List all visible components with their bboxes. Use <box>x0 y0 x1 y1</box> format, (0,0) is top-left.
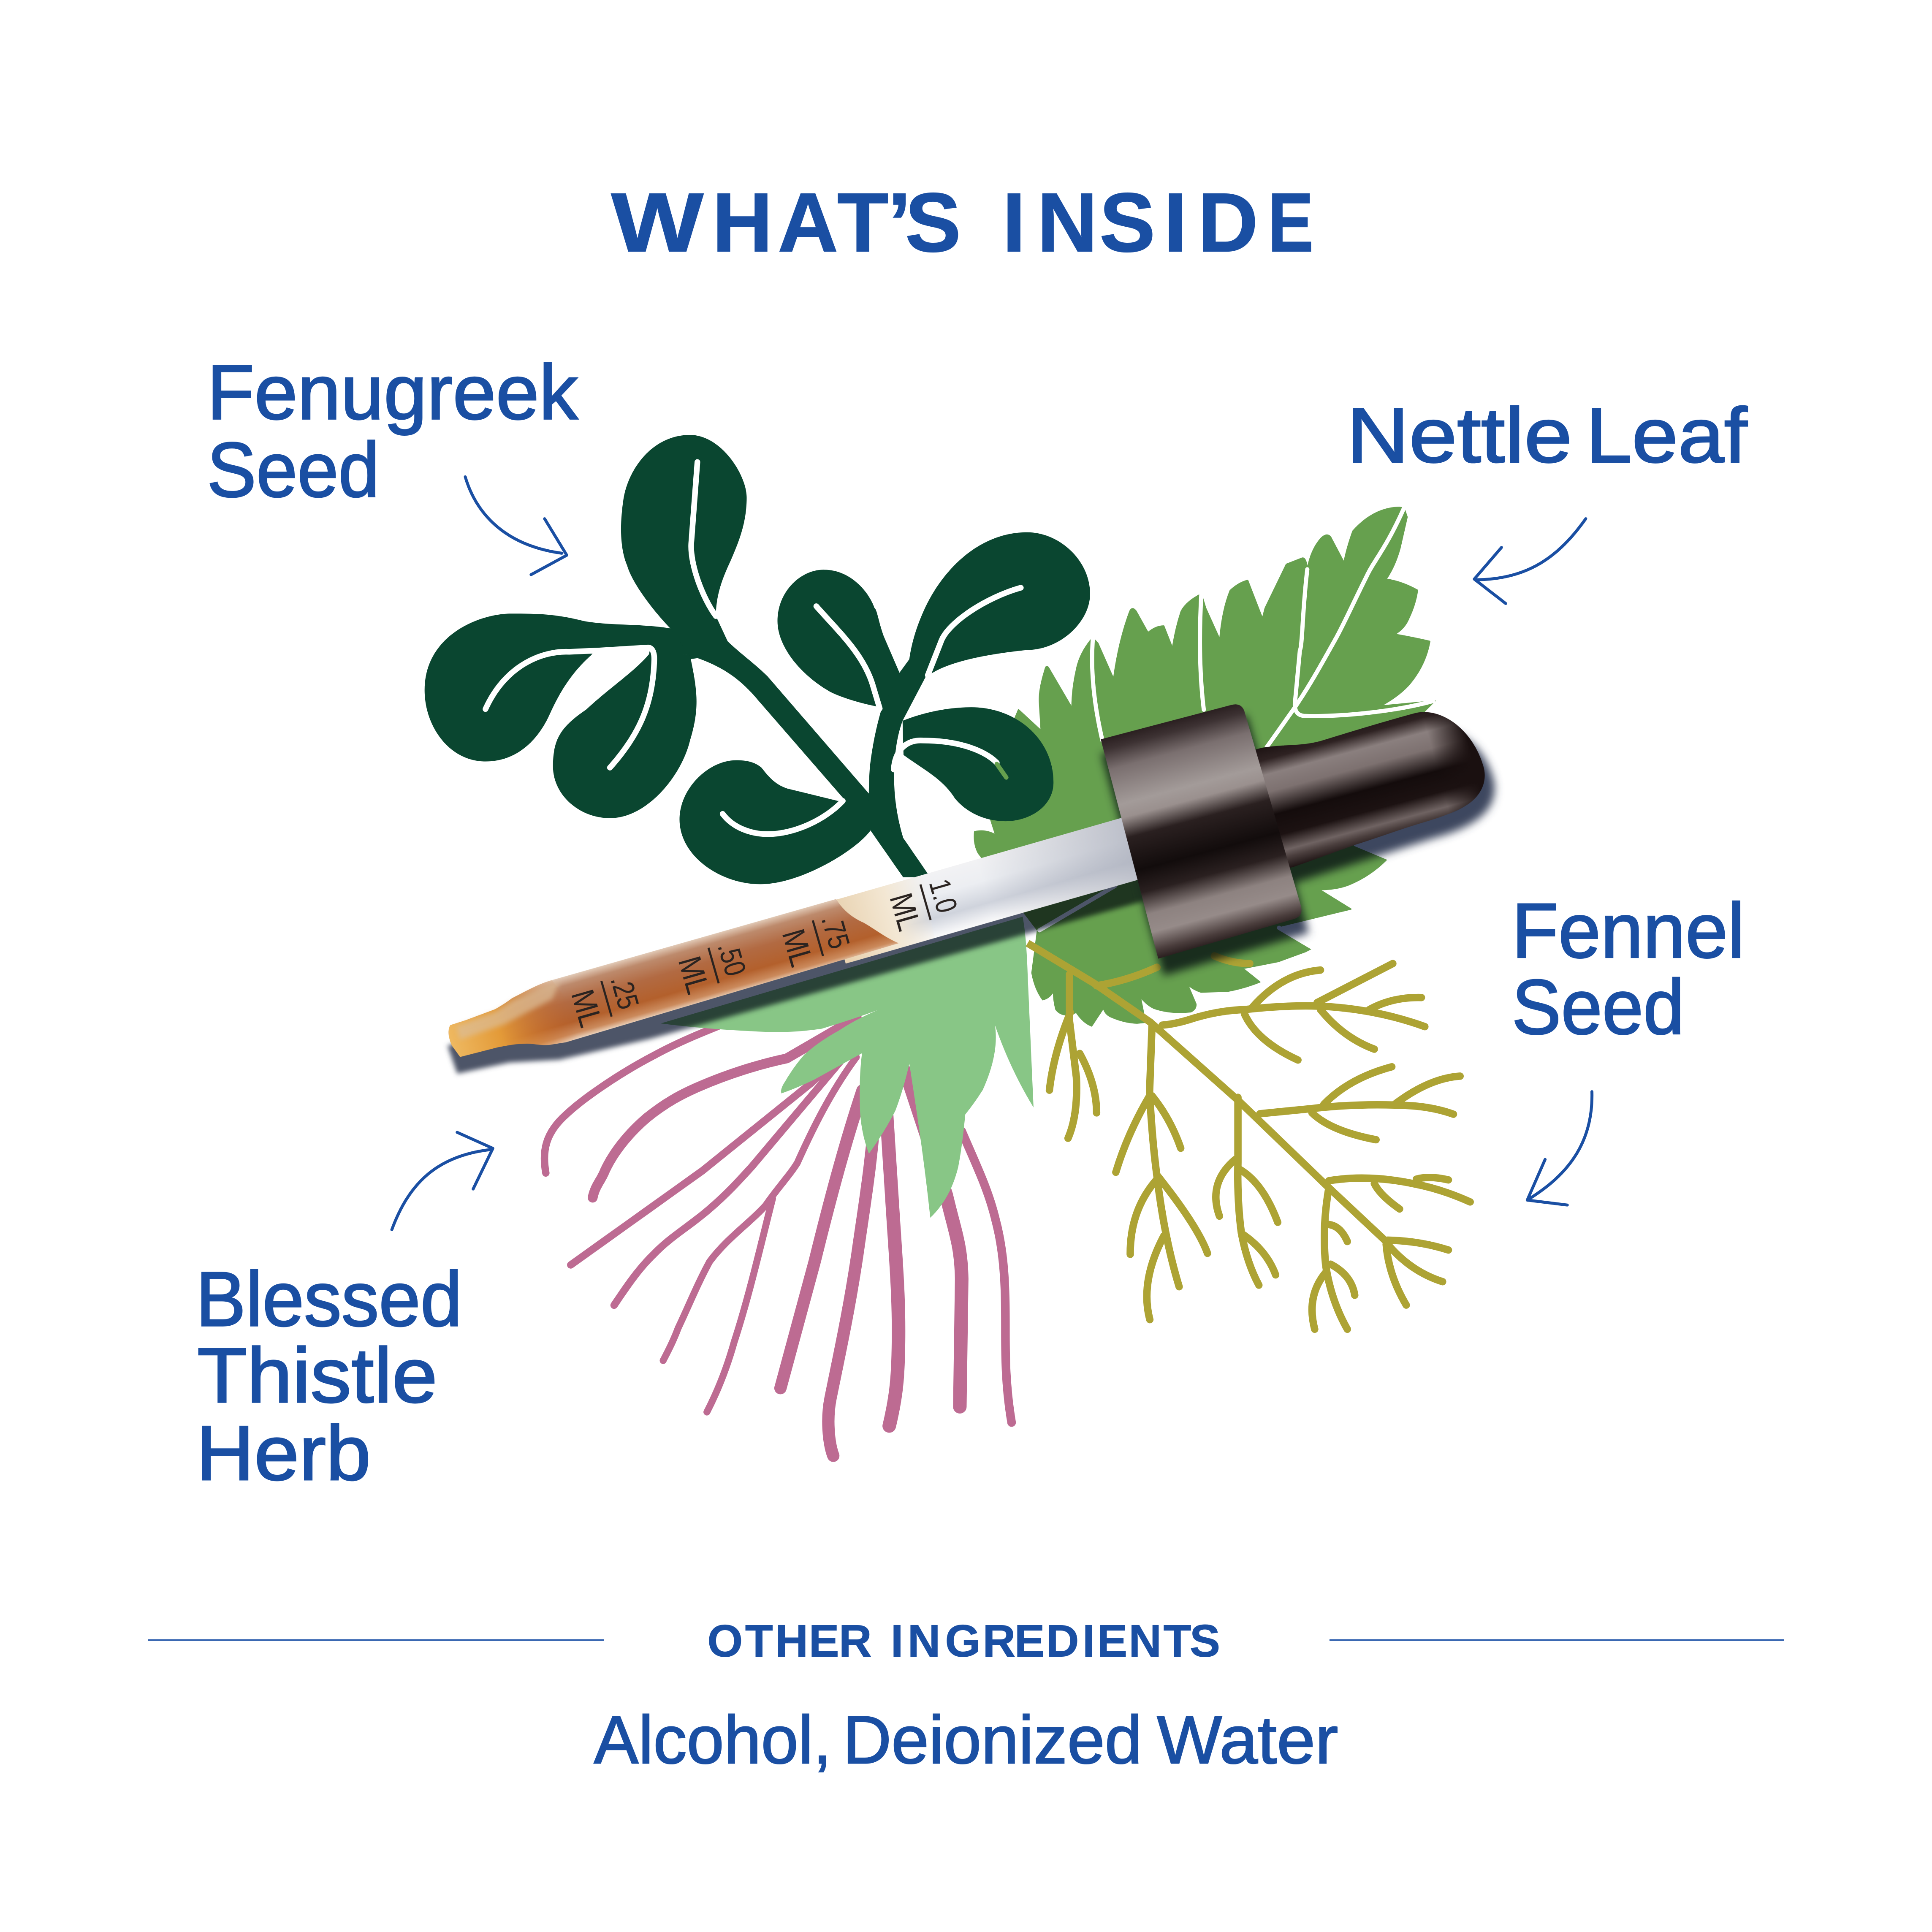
label: Blessed Thistle Herb: Herb <box>196 1410 371 1496</box>
label: Fennel Seed <box>1512 887 1745 1050</box>
illustration: nettle leaf <box>974 507 1435 1026</box>
dropper shadow <box>447 657 1520 1096</box>
graduation: .25 ML <box>563 971 647 1031</box>
label: Nettle Leaf: Leaf <box>1586 392 1747 478</box>
arrow: to blessed thistle <box>392 1132 493 1230</box>
text: other ingredients list: Water <box>1157 1702 1338 1778</box>
dropper: glass tube with liquid <box>442 814 1150 1074</box>
label: Fennel Seed: Seed <box>1512 964 1684 1050</box>
graduation: 1.0 ML <box>882 875 966 935</box>
text: other ingredients list <box>594 1702 1338 1778</box>
heading: other ingredients: OTHER INGREDIENTS <box>707 1615 1220 1666</box>
title: HAT’S INSID <box>712 176 1258 269</box>
title: W <box>611 176 704 269</box>
divider: left <box>148 1639 604 1640</box>
title: E <box>1268 176 1313 269</box>
illustration: fennel <box>1028 943 1470 1329</box>
label: Nettle Leaf: Nettle <box>1347 392 1572 478</box>
illustration: fenugreek <box>425 435 1090 884</box>
arrow: to fennel <box>1527 1092 1592 1205</box>
graduation: .50 ML <box>670 938 754 998</box>
label: Blessed Thistle Herb: Blessed <box>196 1256 462 1342</box>
label: Fenugreek Seed <box>207 349 578 513</box>
graduation: .50 ML: ML <box>671 952 716 998</box>
label: Fenugreek Seed: Fenugreek <box>207 349 578 435</box>
graduation: 1.0 ML: 1.0 <box>923 875 963 917</box>
arrow: to nettle leaf <box>1474 519 1586 603</box>
dropper: bulb and cap <box>1099 646 1510 959</box>
illustration: blessed thistle leaf <box>661 917 1034 1218</box>
label: Blessed Thistle Herb <box>196 1256 462 1496</box>
text: other ingredients list: Alcohol, <box>594 1702 832 1778</box>
illustration: blessed thistle stems <box>544 1018 1012 1456</box>
graduation: .50 ML: .50 <box>711 939 752 980</box>
label: Nettle Leaf <box>1347 392 1747 478</box>
label: Blessed Thistle Herb: Thistle <box>197 1332 437 1419</box>
graduation: .25 ML: ML <box>564 986 609 1031</box>
divider: right <box>1330 1639 1784 1640</box>
graduation: .75 ML <box>774 911 858 971</box>
dropper <box>442 646 1510 1074</box>
graduation: .75 ML: .75 <box>815 911 856 952</box>
label: Fennel Seed: Fennel <box>1512 887 1745 974</box>
graduation: 1.0 ML: ML <box>882 889 927 935</box>
graduation: .75 ML: ML <box>775 925 819 971</box>
text: other ingredients list: Deionized <box>843 1702 1142 1778</box>
label: Fenugreek Seed: Seed <box>207 426 380 513</box>
arrow: to fenugreek <box>465 477 567 575</box>
graduation: .25 ML: .25 <box>604 972 645 1013</box>
